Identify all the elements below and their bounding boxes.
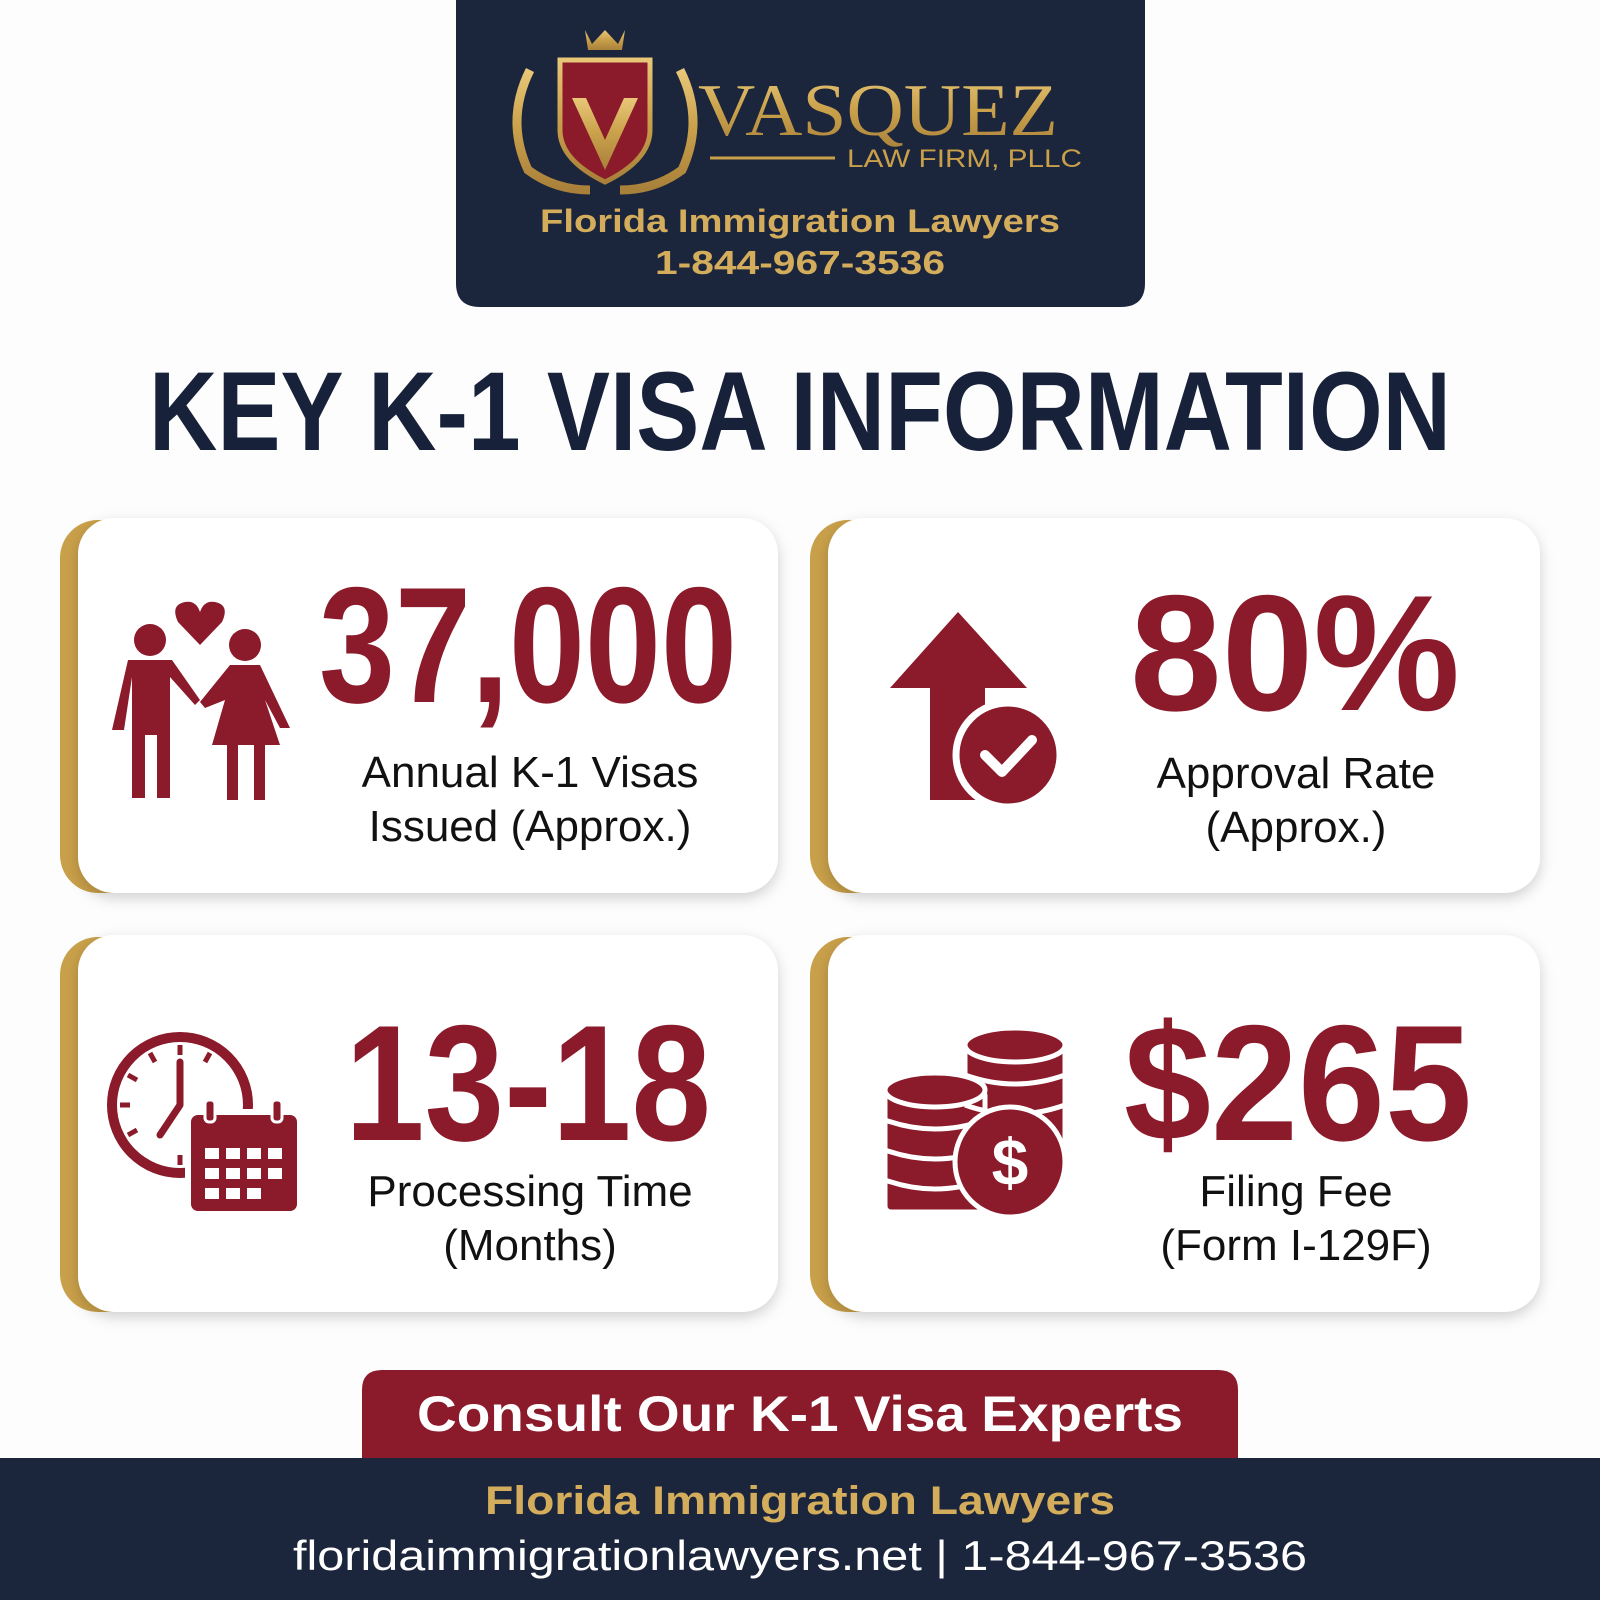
panel: annual visas [60,518,778,893]
header: logo panel: 1-844-967-3536 [655,244,945,281]
footer [0,1458,1600,1600]
panel: approval rate: Approval Rate [1157,749,1435,798]
icon: clock and calendar [112,1037,300,1214]
logo wordmark: VASQUEZ [698,70,1058,152]
panel: approval rate: (Approx.) [1206,803,1386,852]
panel: filing fee: $265 [1124,991,1472,1175]
panel: processing time: (Months) [443,1221,617,1270]
header: logo panel [456,0,1145,307]
panel: approval rate [810,518,1540,893]
panel: annual visas: Annual K-1 Visas [362,748,698,797]
panel: annual visas: 37,000 [319,553,737,737]
footer: floridaimmigrationlawyers.net | 1-844-967-3536 [293,1532,1307,1579]
panel: filing fee: $ [992,1125,1028,1199]
header: logo panel: LAW FIRM, PLLC [847,145,1082,173]
panel: processing time: 13-18 [345,991,711,1175]
panel: filing fee: (Form I-129F) [1160,1221,1432,1270]
panel: approval rate: 80% [1130,561,1460,745]
panel: filing fee [810,935,1540,1312]
panel: annual visas: Issued (Approx.) [369,802,691,851]
callout button [362,1370,1238,1460]
panel: filing fee: Filing Fee [1199,1167,1393,1216]
panel: processing time: Processing Time [367,1167,693,1216]
icon: crest logo [517,30,693,190]
header: logo panel: Florida Immigration Lawyers [540,203,1060,239]
footer: Florida Immigration Lawyers [485,1479,1115,1523]
icon: coin stacks [885,1028,1065,1217]
icon: up arrow with check [890,612,1060,807]
callout button: Consult Our K-1 Visa Experts [417,1386,1183,1442]
icon: couple with heart [112,602,290,800]
panel: processing time [60,935,778,1312]
